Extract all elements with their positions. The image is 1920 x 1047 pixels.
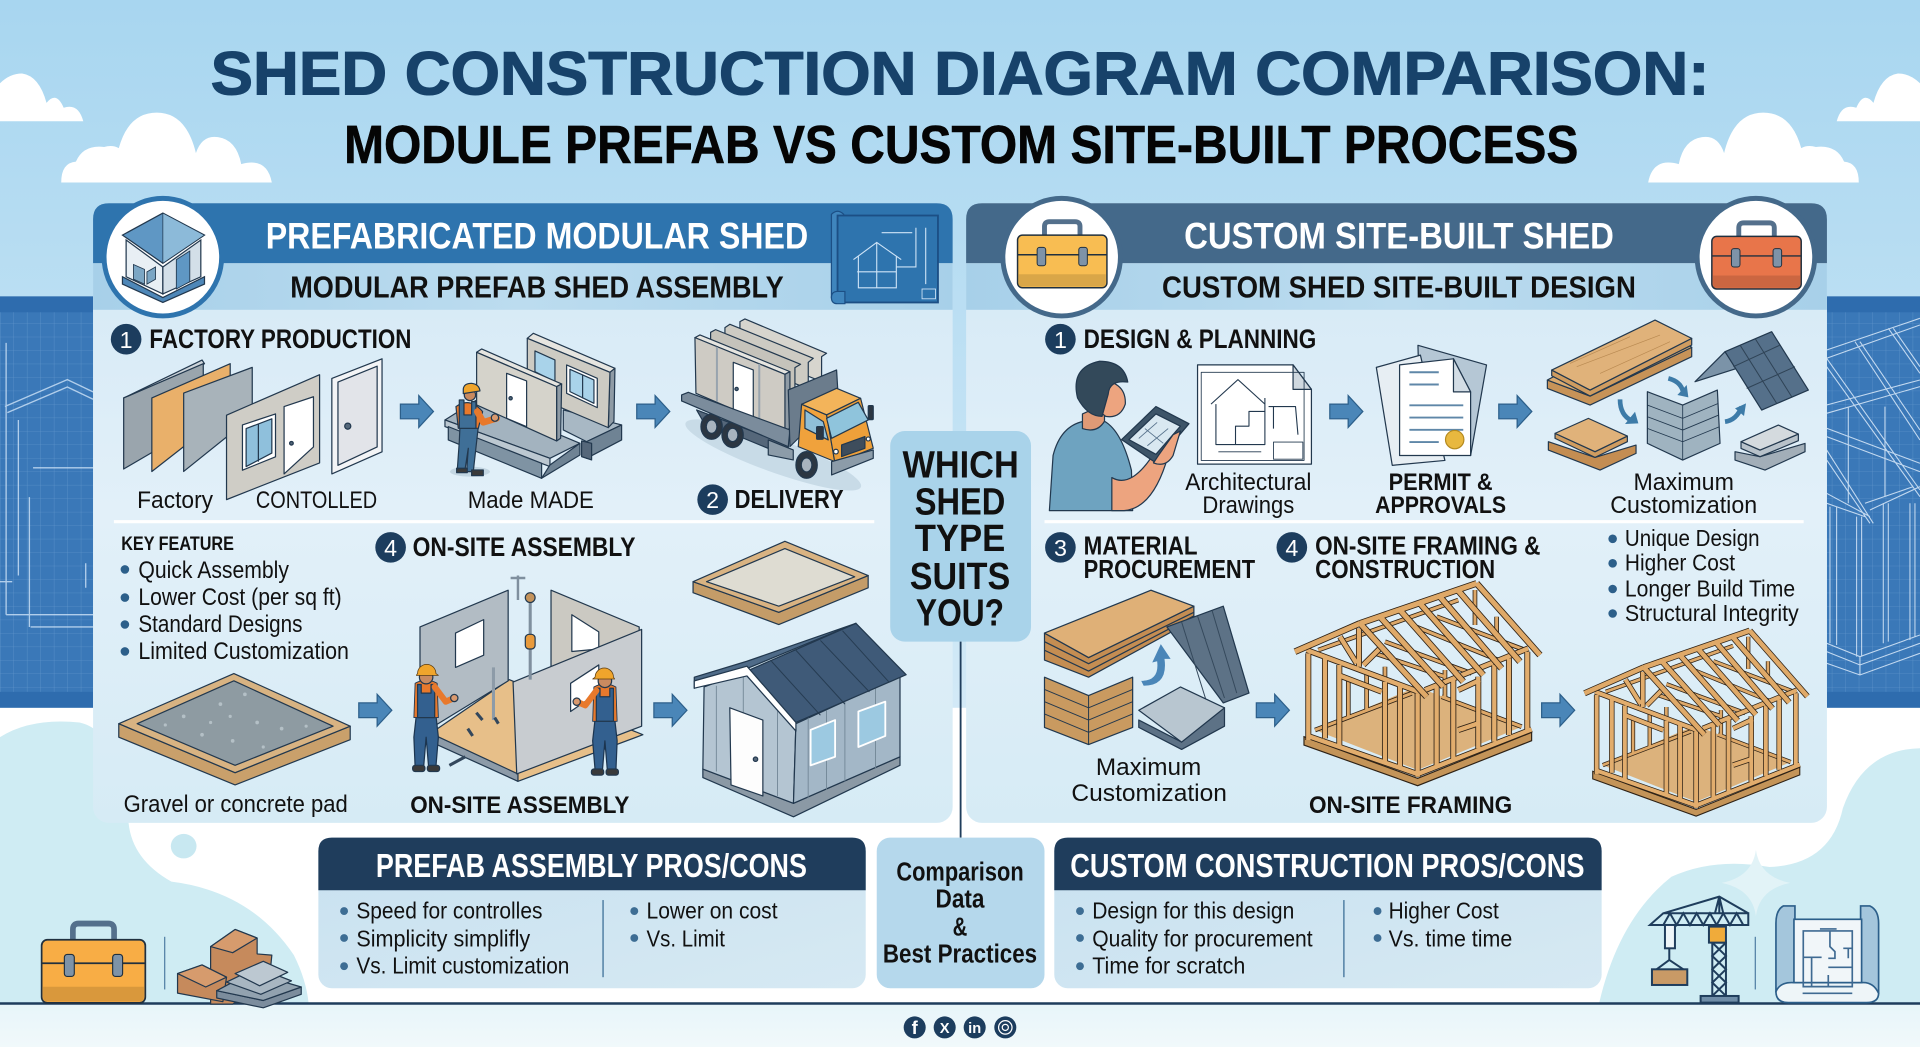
illustration: factory worker and platform — [445, 333, 622, 478]
decorative hill right — [1599, 748, 1920, 1003]
panel: custom site-built shed — [966, 198, 1827, 823]
step 4 heading: ON-SITE ASSEMBLY — [413, 532, 636, 562]
caption: permit and approvals: PERMIT & — [1389, 469, 1493, 496]
feature list: Higher Cost — [1625, 550, 1736, 576]
feature list: Longer Build Time — [1625, 575, 1795, 601]
caption: architectural drawings: Drawings — [1202, 492, 1294, 519]
step 1 heading: 1 — [120, 327, 133, 353]
illustration: procurement materials — [1044, 590, 1249, 749]
key feature list: Standard Designs — [138, 611, 302, 638]
heading: prefabricated modular shed: PREFABRICATED MODULAR SHED — [266, 216, 808, 257]
center question callout: YOU? — [916, 593, 1004, 635]
caption: permit and approvals: APPROVALS — [1375, 492, 1506, 519]
social icons: in — [968, 1021, 981, 1037]
subtitle: MODULE PREFAB VS CUSTOM SITE-BUILT PROCESS — [344, 115, 1578, 175]
step 2 heading: DELIVERY — [735, 486, 844, 514]
step 3 heading: MATERIAL — [1084, 533, 1198, 561]
panel: prefabricated modular shed — [93, 198, 953, 823]
caption: factory: Factory — [137, 487, 214, 514]
panel: prefab pros and cons: PREFAB ASSEMBLY PROS/CONS — [376, 848, 807, 885]
key feature list: KEY FEATURE — [121, 533, 234, 555]
key feature list: Limited Customization — [138, 638, 349, 665]
caption: maximum customization: Maximum — [1096, 754, 1201, 781]
center question callout — [890, 431, 1031, 642]
panel: prefab pros and cons: Simplicity simplifly — [356, 926, 531, 952]
arrow — [637, 396, 670, 427]
decorative hill left — [0, 722, 309, 1003]
caption: made: Made MADE — [468, 487, 594, 514]
caption: maximum customization: Customization — [1610, 492, 1757, 519]
illustration: on-site assembly with workers — [413, 576, 643, 781]
illustration: permit documents — [1376, 345, 1487, 465]
footer strip — [0, 1004, 1920, 1047]
key feature list: Quick Assembly — [138, 557, 290, 584]
arrow — [1499, 396, 1532, 427]
subheading: custom shed site-built design: CUSTOM SHED SITE-BUILT DESIGN — [1162, 271, 1636, 305]
arrow — [400, 396, 433, 427]
illustration: delivery truck — [680, 319, 873, 503]
step 4 heading — [1277, 532, 1540, 584]
step 4 heading: 4 — [384, 535, 397, 561]
caption: controlled: CONTOLLED — [256, 487, 377, 514]
caption: gravel or concrete pad: Gravel or concrete pad — [124, 791, 348, 818]
arrow — [1542, 694, 1575, 726]
panel: prefab pros and cons: Lower on cost — [647, 897, 778, 923]
step 1 heading: DESIGN & PLANNING — [1084, 324, 1316, 354]
caption: maximum customization — [1610, 469, 1757, 519]
illustration: on-site wood frame — [1295, 583, 1540, 786]
panel header band — [93, 203, 953, 263]
illustration: concrete pad — [119, 674, 350, 785]
title: SHED CONSTRUCTION DIAGRAM COMPARISON: — [211, 39, 1709, 107]
key feature list: Lower Cost (per sq ft) — [138, 584, 342, 611]
icon: toolbox bottom left — [42, 924, 145, 1003]
panel sub-header band — [966, 263, 1827, 310]
heading: custom site-built shed: CUSTOM SITE-BUILT SHED — [1184, 216, 1614, 257]
feature list — [1608, 525, 1799, 626]
social icons: X — [940, 1021, 950, 1037]
panel: comparison data: Comparison — [896, 858, 1024, 886]
decorative sparkle — [1722, 850, 1790, 916]
panel: comparison data: & — [953, 914, 967, 942]
illustration: person with tablet — [1049, 361, 1189, 511]
decorative dot — [171, 834, 197, 858]
center question callout: TYPE — [915, 518, 1005, 560]
panel: comparison data: Data — [936, 885, 985, 913]
panel: prefab pros and cons: Vs. Limit customization — [356, 953, 569, 979]
icon: blueprint scroll — [831, 211, 938, 304]
clouds right — [1648, 73, 1920, 182]
icon: floor plan scroll — [1776, 906, 1879, 1003]
panel: comparison data: Best Practices — [883, 941, 1037, 969]
illustration: completed wood frame — [1585, 631, 1807, 816]
arrow — [654, 694, 687, 726]
background sky — [0, 0, 1920, 735]
illustration: building materials — [1547, 320, 1808, 470]
step 4 heading: 4 — [1285, 535, 1298, 561]
social icons: f — [912, 1017, 919, 1038]
center question callout: SHED — [915, 481, 1005, 523]
panel header band — [966, 203, 1827, 263]
panel: custom pros and cons — [1054, 838, 1602, 988]
step 3 heading: PROCUREMENT — [1084, 556, 1255, 584]
caption: architectural drawings — [1185, 469, 1311, 519]
icon: bricks and stones — [178, 929, 301, 1008]
illustration: finished modular shed — [694, 623, 906, 817]
center question callout: SUITS — [910, 556, 1010, 598]
icon: house badge — [104, 198, 222, 316]
panel: custom pros and cons: Higher Cost — [1389, 897, 1499, 923]
panel: custom pros and cons: Design for this design — [1092, 897, 1294, 923]
center question callout: WHICH — [902, 445, 1019, 487]
panel sub-header band — [93, 263, 953, 310]
caption: maximum customization: Customization — [1071, 780, 1227, 807]
caption: maximum customization — [1071, 754, 1227, 807]
panel: prefab pros and cons: Speed for controlles — [356, 897, 542, 923]
key feature list — [121, 533, 349, 665]
panel: custom pros and cons: Quality for procurement — [1092, 926, 1313, 952]
blueprint band right — [1827, 296, 1920, 708]
panel: custom pros and cons: CUSTOM CONSTRUCTION PROS/CONS — [1070, 848, 1584, 885]
step 4 heading: CONSTRUCTION — [1315, 556, 1495, 584]
panel: custom pros and cons: Vs. time time — [1389, 926, 1512, 952]
arrow — [1256, 694, 1289, 726]
clouds left — [0, 73, 272, 182]
icon: red toolbox badge — [1697, 198, 1815, 316]
panel: prefab pros and cons — [318, 838, 866, 988]
caption: permit and approvals — [1375, 469, 1506, 519]
step 1 heading: 1 — [1054, 327, 1067, 353]
step 2 heading: 2 — [706, 487, 719, 513]
title — [211, 39, 1709, 175]
step 4 heading: ON-SITE FRAMING & — [1315, 533, 1540, 561]
step 2 heading — [697, 484, 844, 515]
feature list: Structural Integrity — [1625, 600, 1799, 626]
arrow — [1330, 396, 1363, 427]
illustration: factory wall panels — [124, 359, 382, 500]
caption: architectural drawings: Architectural — [1185, 469, 1311, 496]
arrow — [359, 694, 392, 726]
blueprint band left — [0, 296, 93, 708]
caption: maximum customization: Maximum — [1633, 469, 1734, 496]
step 1 heading: FACTORY PRODUCTION — [149, 324, 411, 354]
icon: yellow toolbox badge — [1003, 198, 1120, 316]
icon: construction crane — [1650, 897, 1748, 1003]
panel: custom pros and cons: Time for scratch — [1092, 953, 1245, 979]
social icons — [904, 1016, 1016, 1038]
caption: on-site framing: ON-SITE FRAMING — [1309, 792, 1512, 819]
subheading: modular prefab shed assembly: MODULAR PREFAB SHED ASSEMBLY — [290, 271, 784, 305]
step 3 heading: 3 — [1054, 535, 1067, 561]
step 3 heading — [1045, 532, 1255, 584]
panel: comparison data — [877, 838, 1044, 988]
illustration: gravel pad raised — [693, 541, 868, 625]
feature list: Unique Design — [1625, 525, 1760, 551]
illustration: architectural drawing — [1198, 365, 1311, 464]
panel: prefab pros and cons: Vs. Limit — [647, 926, 725, 952]
caption: on-site assembly: ON-SITE ASSEMBLY — [410, 792, 629, 819]
